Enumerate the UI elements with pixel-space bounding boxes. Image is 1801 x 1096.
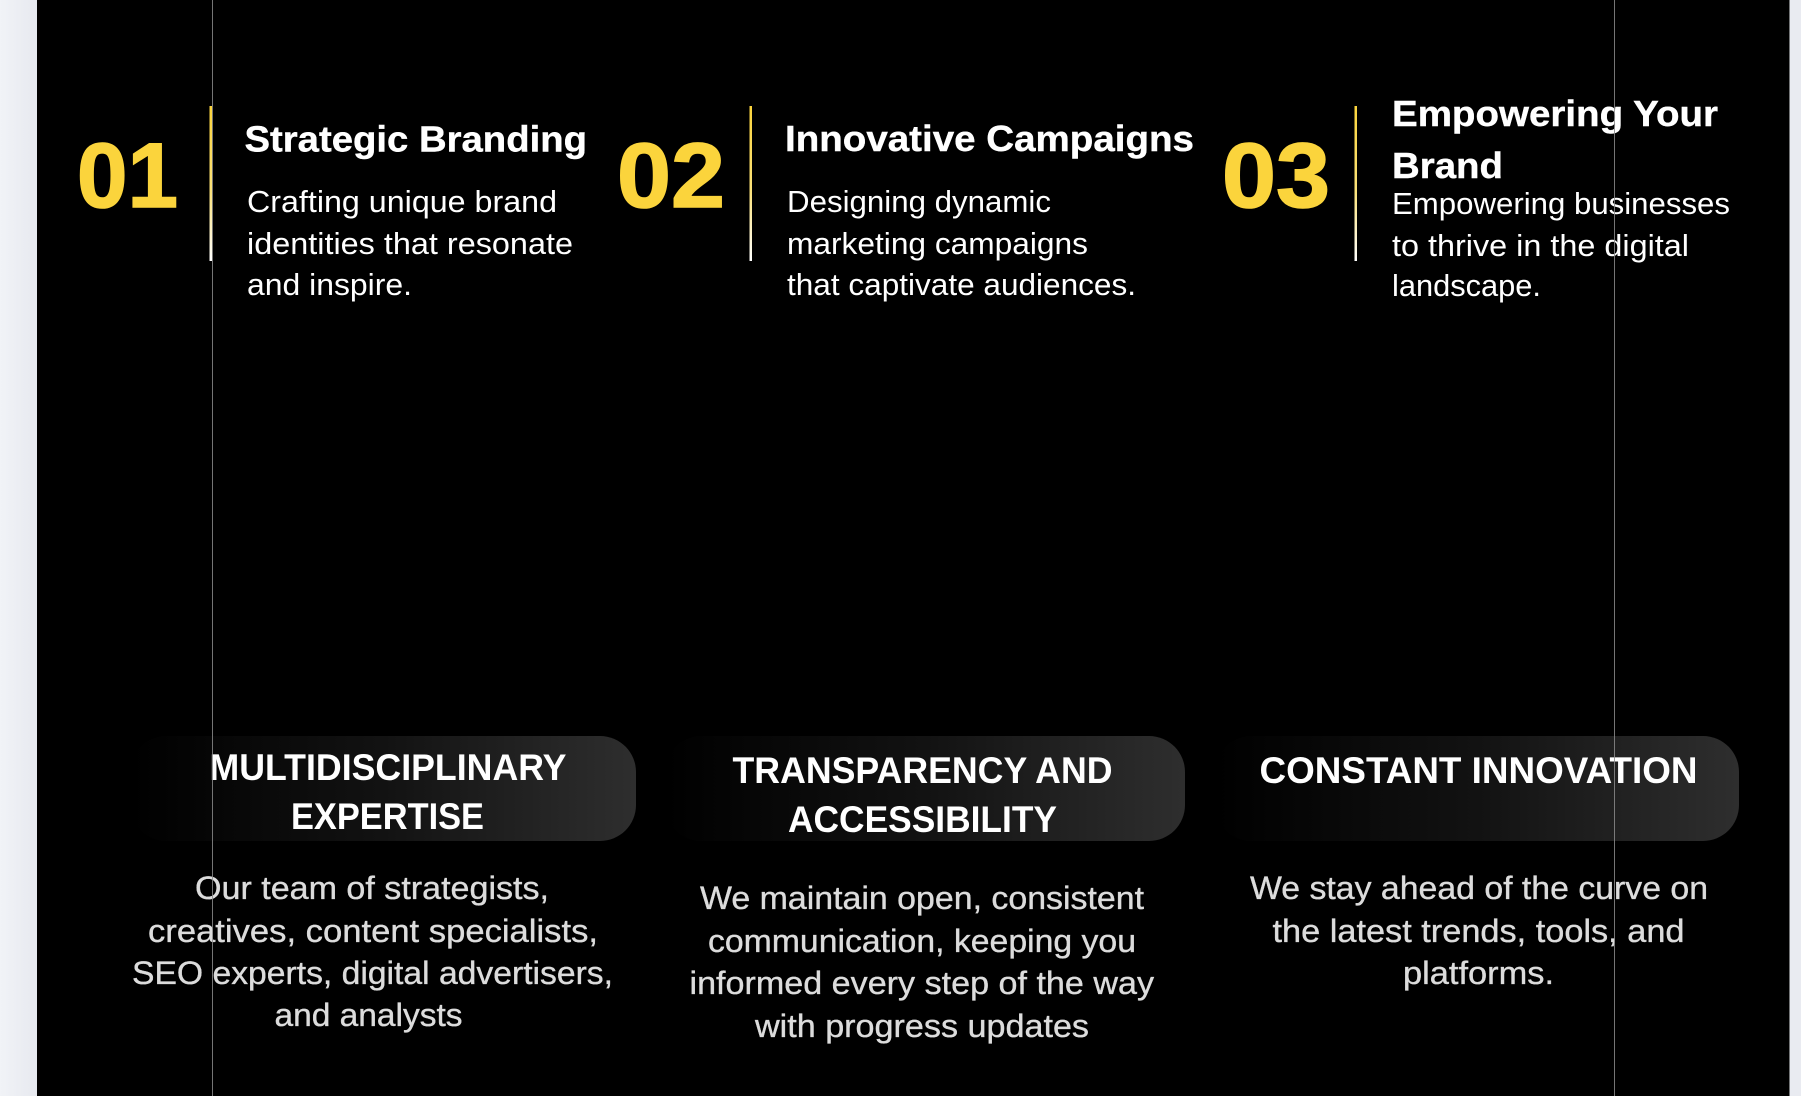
heading: Strategic Branding: Strategic Branding — [244, 118, 587, 160]
heading: Constant Innovation: CONSTANT INNOVATION — [1260, 750, 1698, 791]
text block: Constant Innovation description — [1250, 870, 1708, 991]
panel: pill backgrounds — [130, 736, 1739, 841]
text block: Strategic Branding description: identities that resonate — [247, 226, 573, 261]
heading: Transparency and Accessibility — [732, 750, 1112, 840]
text block: Constant Innovation description: the latest trends, tools, and — [1272, 913, 1684, 949]
text block: Multidisciplinary Expertise description: Our team of strategists, — [195, 870, 549, 906]
text block: Transparency and Accessibility description: informed every step of the way — [690, 965, 1154, 1001]
heading: Transparency and Accessibility: ACCESSIBILITY — [788, 799, 1057, 840]
panel: Multidisciplinary Expertise — [132, 747, 613, 1033]
text block: Strategic Branding description: and inspire. — [247, 267, 412, 302]
panel: item 02 Innovative Campaigns — [617, 106, 1194, 302]
text block: Strategic Branding description: Crafting unique brand — [247, 184, 557, 219]
text block: Innovative Campaigns description — [787, 184, 1136, 302]
text block: Transparency and Accessibility description: We maintain open, consistent — [700, 880, 1144, 916]
divider 02 — [750, 106, 752, 261]
page background right margin — [1789, 0, 1801, 1096]
text block: Transparency and Accessibility description — [690, 880, 1154, 1044]
heading: Empowering Your Brand: Empowering Your — [1392, 93, 1718, 134]
divider 01 — [210, 106, 212, 261]
panel: item 01 Strategic Branding — [77, 106, 587, 302]
text block: Transparency and Accessibility description: with progress updates — [754, 1008, 1089, 1044]
text block: Innovative Campaigns description: that captivate audiences. — [787, 267, 1136, 302]
text block: Multidisciplinary Expertise description — [132, 870, 613, 1033]
panel: Transparency and Accessibility — [690, 750, 1154, 1044]
text block: Innovative Campaigns description: marketing campaigns — [787, 226, 1088, 261]
text block: Multidisciplinary Expertise description: creatives, content specialists, — [148, 913, 598, 949]
text block: Multidisciplinary Expertise description: SEO experts, digital advertisers, — [132, 955, 613, 991]
text block: Multidisciplinary Expertise description: and analysts — [274, 997, 462, 1033]
text block: Empowering Your Brand description: to thrive in the digital — [1392, 228, 1689, 263]
page background left margin — [0, 0, 37, 1096]
heading: Transparency and Accessibility: TRANSPARENCY AND — [732, 750, 1112, 791]
number 03: 03 — [1222, 125, 1330, 227]
heading: Multidisciplinary Expertise: MULTIDISCIPLINARY — [210, 747, 567, 788]
text block: Constant Innovation description: platforms. — [1403, 955, 1554, 991]
text block: Empowering Your Brand description: landscape. — [1392, 268, 1541, 303]
text block: Innovative Campaigns description: Designing dynamic — [787, 184, 1051, 219]
heading: Empowering Your Brand — [1392, 93, 1718, 186]
text block: Strategic Branding description — [247, 184, 573, 302]
text block: Constant Innovation description: We stay ahead of the curve on — [1250, 870, 1708, 906]
number 01: 01 — [77, 125, 178, 227]
divider 03 — [1354, 106, 1357, 261]
text block: Empowering Your Brand description — [1392, 186, 1730, 303]
panel: Constant Innovation — [1250, 750, 1708, 991]
heading: Multidisciplinary Expertise: EXPERTISE — [291, 796, 484, 837]
heading: Innovative Campaigns: Innovative Campaigns — [785, 118, 1194, 159]
heading: Empowering Your Brand: Brand — [1392, 145, 1503, 186]
text block: Empowering Your Brand description: Empowering businesses — [1392, 186, 1730, 221]
panel: item 03 Empowering Your Brand — [1222, 93, 1730, 303]
number 02: 02 — [617, 125, 725, 227]
heading: Multidisciplinary Expertise — [210, 747, 567, 837]
text block: Transparency and Accessibility description: communication, keeping you — [708, 923, 1136, 959]
